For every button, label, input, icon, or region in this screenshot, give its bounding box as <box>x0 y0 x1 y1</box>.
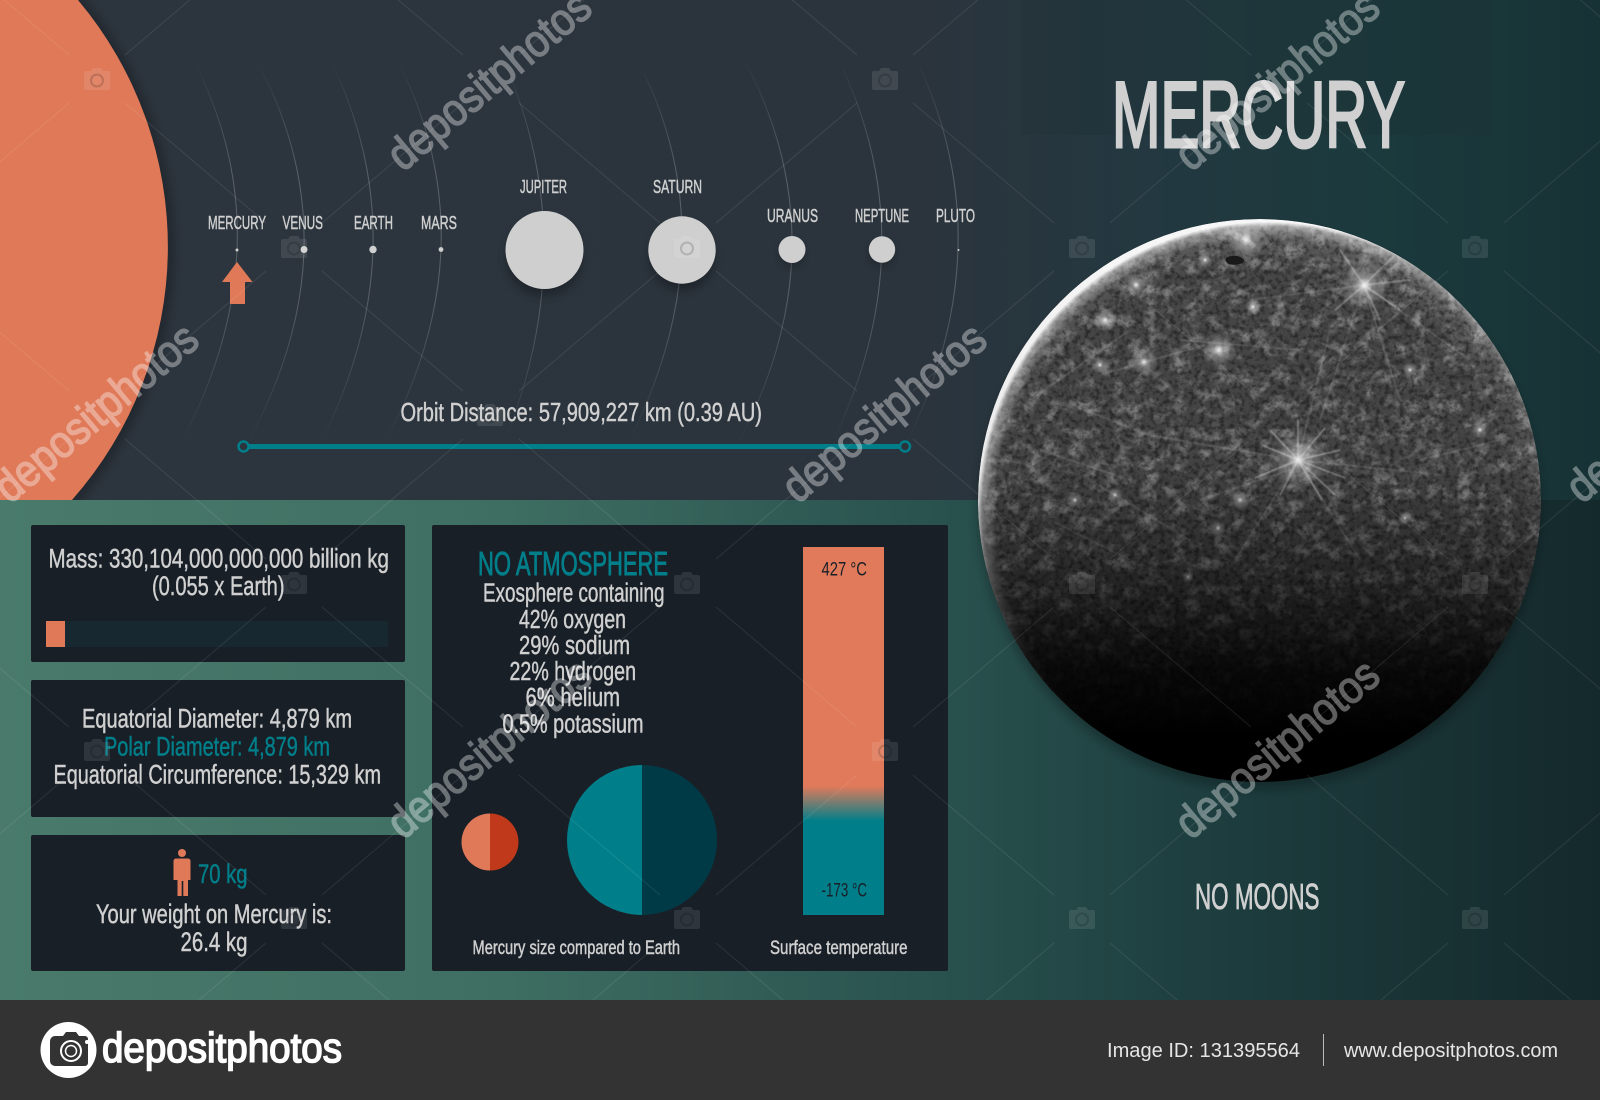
solar system diagram <box>179 63 975 447</box>
atmosphere composition: 29% sodium <box>519 632 630 660</box>
atmosphere composition: 6% helium <box>526 684 620 712</box>
arrow: current planet <box>222 262 252 304</box>
orbit distance <box>238 397 910 452</box>
watermark text: depositphotos <box>377 648 601 848</box>
orbit lines <box>179 63 958 447</box>
planet: Pluto <box>936 206 975 251</box>
planet: Saturn <box>648 177 716 291</box>
sun <box>0 0 174 500</box>
mass text <box>48 544 389 601</box>
footer bar <box>0 1000 1600 1100</box>
dark shading <box>978 219 1540 690</box>
icon: depositphotos logo <box>40 1022 96 1078</box>
panel: weight <box>31 835 405 971</box>
mass text: Mass: 330,104,000,000,000 billion kg <box>48 544 389 574</box>
reference weight: 70 kg <box>198 859 248 889</box>
planet: Mars: MARS <box>421 213 457 233</box>
temperature bar: -173 °C <box>822 880 867 902</box>
panel: atmosphere, size and temperature <box>432 525 948 971</box>
weight on mercury: Your weight on Mercury is: <box>96 899 332 929</box>
planet: Saturn: SATURN <box>653 177 702 197</box>
watermark text: depositphotos <box>772 312 996 512</box>
temperature bar: 427 °C <box>822 558 867 580</box>
watermark text: depositphotos <box>1165 648 1389 848</box>
atmosphere composition <box>483 580 664 738</box>
weight on mercury: 26.4 kg <box>180 927 248 957</box>
panel: diameters <box>31 680 405 817</box>
diameter text: Polar Diameter: 4,879 km <box>104 732 330 762</box>
planet: Uranus <box>767 206 818 267</box>
planet: Venus <box>282 213 323 253</box>
planet: Mars <box>421 213 457 252</box>
atmosphere composition: Exosphere containing <box>483 580 664 608</box>
mass bar <box>46 621 388 647</box>
orbit distance label: Orbit Distance: 57,909,227 km (0.39 AU) <box>400 397 762 427</box>
image id: Image ID: 131395564 <box>1107 1040 1300 1062</box>
planet: Pluto: PLUTO <box>936 206 975 226</box>
moons note: NO MOONS <box>1195 876 1320 917</box>
diameter text: Equatorial Circumference: 15,329 km <box>54 760 381 790</box>
watermark camera marks <box>84 68 1488 929</box>
planet: Neptune: NEPTUNE <box>855 206 909 226</box>
atmosphere composition: 42% oxygen <box>519 606 626 634</box>
temperature bar <box>803 547 884 915</box>
surface streaks <box>1030 250 1500 560</box>
planet: Mercury: MERCURY <box>208 213 266 233</box>
atmosphere composition: 0.5% potassium <box>502 710 644 738</box>
planet: Neptune <box>855 206 909 267</box>
planet: Uranus: URANUS <box>767 206 818 226</box>
planet: Mercury photo <box>978 219 1542 790</box>
watermark text <box>0 0 1600 848</box>
icon: person <box>174 849 190 896</box>
temperature caption: Surface temperature <box>770 937 908 959</box>
weight on mercury <box>96 899 332 957</box>
diameter text: Equatorial Diameter: 4,879 km <box>82 704 352 734</box>
bright craters <box>1067 220 1489 583</box>
mass text: (0.055 x Earth) <box>152 571 284 601</box>
planet: Mercury <box>208 213 266 252</box>
orbit distance bar <box>238 442 910 452</box>
atmosphere heading: NO ATMOSPHERE <box>478 545 668 582</box>
planet: Jupiter: JUPITER <box>520 177 567 197</box>
panel: mass <box>31 525 405 662</box>
planet: Earth: EARTH <box>354 213 393 233</box>
website: www.depositphotos.com <box>1343 1040 1558 1062</box>
size comparison: Earth <box>567 765 717 915</box>
size comparison: Mercury <box>461 814 518 870</box>
diameter text <box>54 704 381 790</box>
title: MERCURY <box>1112 62 1405 167</box>
planet: Jupiter <box>506 177 584 296</box>
planet: Venus: VENUS <box>282 213 323 233</box>
title backdrop <box>1022 0 1492 135</box>
background: upper band <box>0 0 1600 500</box>
atmosphere composition: 22% hydrogen <box>510 658 636 686</box>
planet: Earth <box>354 213 393 253</box>
size caption: Mercury size compared to Earth <box>472 937 680 959</box>
logo wordmark: depositphotos <box>102 1024 342 1071</box>
background: lower band <box>0 500 1600 1000</box>
